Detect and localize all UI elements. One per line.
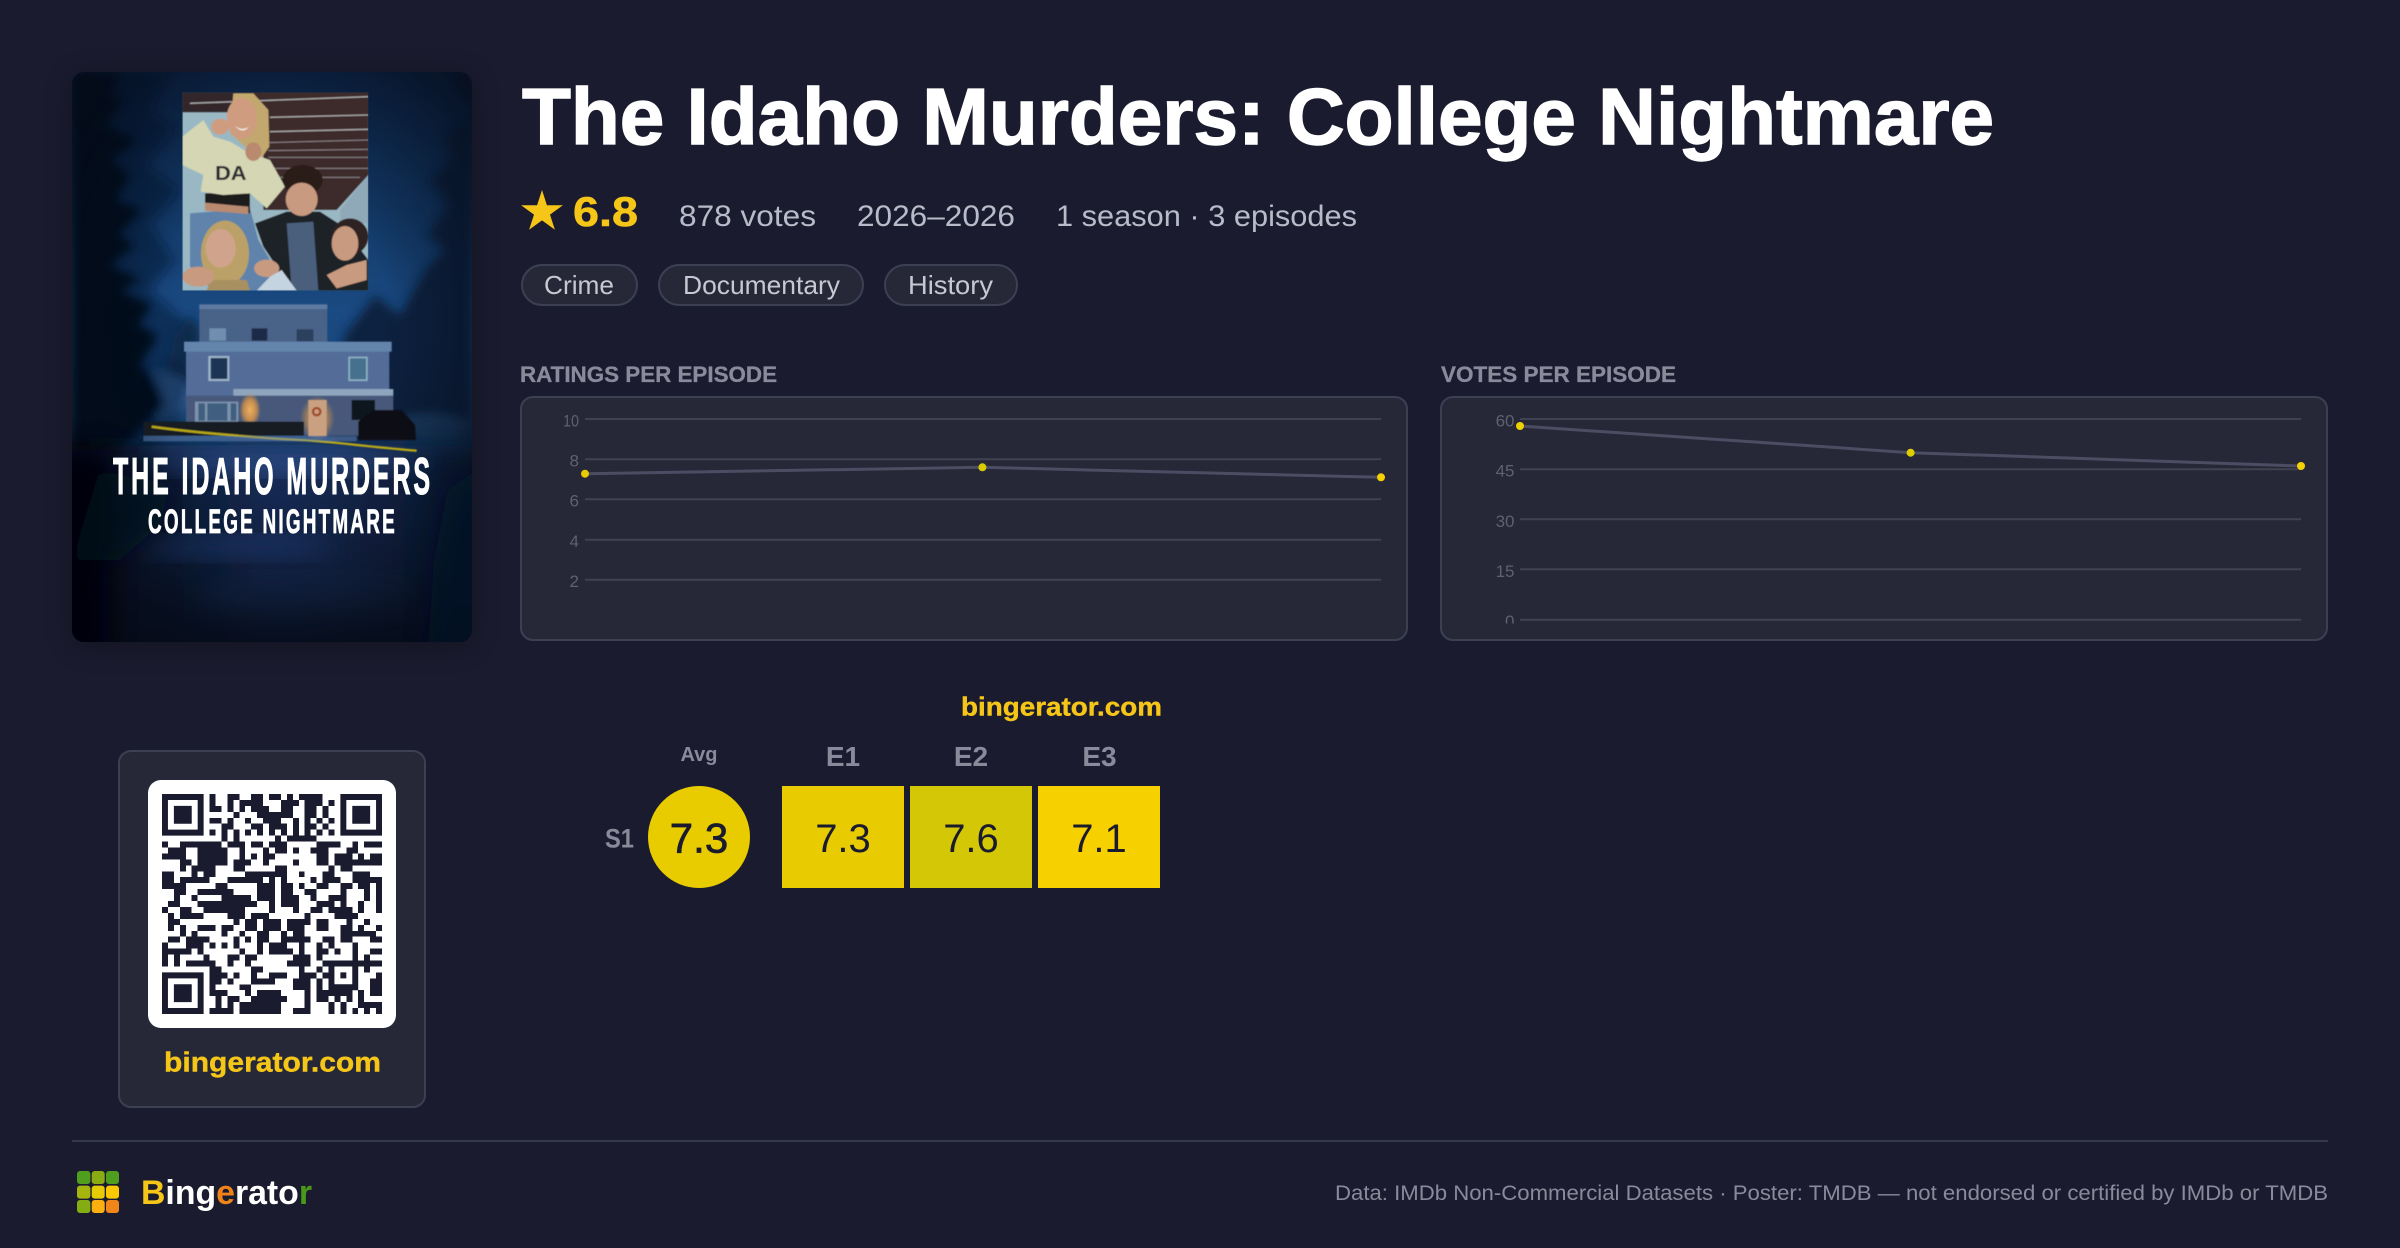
season average circle [648,786,750,888]
chart: ratings per episode: 10 [563,412,579,430]
QR card [119,751,425,1107]
QR code [148,780,396,1028]
votes count: 878 votes [679,200,816,233]
chart: votes per episode: 15 [1496,562,1514,581]
chart: votes per episode: 30 [1496,512,1514,531]
chart: votes per episode: 60 [1496,412,1514,430]
season average circle: 7.3 [670,814,728,862]
episode cell E3: 7.1 [1071,817,1127,861]
episode headers: E2 [954,741,988,772]
episode cell E1: 7.3 [815,817,871,861]
episode cell E2: 7.6 [943,817,999,861]
episode cell E3 [1038,786,1160,888]
episode cell E1 [782,786,904,888]
tag: History [885,265,1017,305]
tag: Documentary: Documentary [683,270,840,300]
tag: Documentary [659,265,863,305]
tag: Crime [522,265,637,305]
logo wordmark: Bingerator [141,1174,312,1212]
rating and stats row [521,188,1357,235]
episode headers: E1 [826,741,860,772]
poster: THE IDAHO MURDERS [113,448,433,506]
episode headers: E3 [1082,741,1117,772]
heading: ratings per episode: RATINGS PER EPISODE [520,362,777,387]
tag: History: History [908,270,993,300]
logo icon [77,1171,119,1213]
chart: ratings per episode: 8 [570,452,579,470]
chart: votes per episode: 0 [1505,612,1514,631]
poster family photo [182,92,368,291]
icon: star [521,190,563,230]
chart: votes per episode: 45 [1496,462,1514,480]
QR caption: bingerator.com [164,1046,381,1078]
rating value: 6.8 [573,188,638,235]
episode ratings heatmap [605,741,1160,888]
title: The Idaho Murders: College Nightmare [522,72,1994,161]
seasons and episodes: 1 season · 3 episodes [1056,200,1357,233]
average column label: Avg [680,744,718,766]
episode cell E2 [910,786,1032,888]
heatmap watermark: bingerator.com [961,692,1162,722]
years: 2026–2026 [857,200,1015,233]
episode headers [826,741,1117,772]
poster [30,72,520,706]
chart: ratings per episode: 2 [570,572,579,591]
tag: Crime: Crime [544,270,614,300]
poster house [143,304,417,451]
heading: votes per episode: VOTES PER EPISODE [1441,362,1676,387]
footer attribution: Data: IMDb Non-Commercial Datasets · Poster: TMDB — not endorsed or certified by IMDb or TMDB [1335,1182,2328,1205]
chart: ratings per episode: 6 [570,492,579,510]
chart: ratings per episode [521,397,1407,640]
chart: votes per episode [1441,397,2327,640]
poster title [113,457,430,534]
poster family photo: DA [215,162,247,185]
season label: S1 [605,824,634,854]
genre tags [522,265,1017,305]
chart: ratings per episode: 4 [570,532,579,551]
poster title: COLLEGE NIGHTMARE [148,503,397,541]
